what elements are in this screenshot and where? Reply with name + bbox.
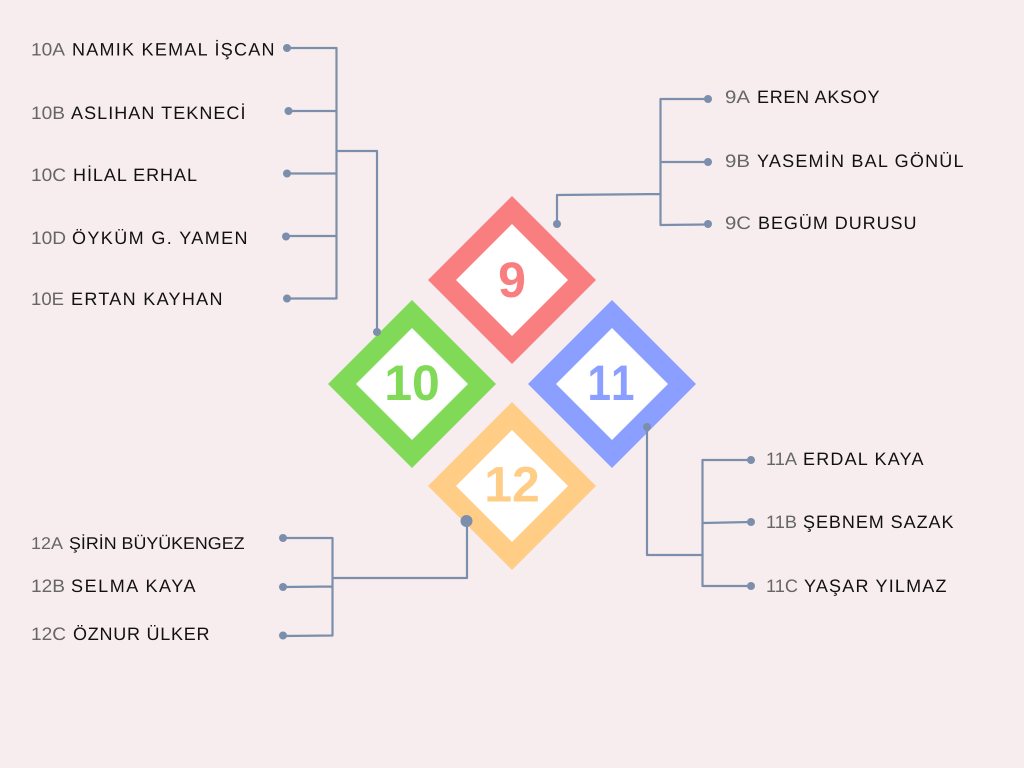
connector: group 11	[643, 423, 755, 590]
label 9B: YASEMİN BAL GÖNÜL	[757, 151, 964, 171]
label 11C: YAŞAR YILMAZ	[804, 576, 946, 596]
label 11C: 11C	[766, 576, 798, 596]
diamond 9: 9	[498, 252, 526, 308]
label 9C: BEGÜM DURUSU	[758, 213, 916, 233]
label 10E: 10E	[31, 289, 64, 309]
label 12C: 12C	[31, 624, 66, 644]
label 10B: 10B	[31, 103, 65, 123]
label 10A: NAMIK KEMAL İŞCAN	[72, 40, 274, 60]
connector: group 10	[282, 44, 381, 336]
diamond 11: 11	[588, 355, 634, 411]
label 10C: 10C	[31, 165, 66, 185]
diamond 12: 12	[484, 456, 540, 512]
label 9A: EREN AKSOY	[757, 87, 880, 107]
label 11A: 11A	[766, 449, 797, 469]
label 12B: 12B	[31, 576, 65, 596]
diamond 12	[428, 402, 596, 570]
label 11B: 11B	[766, 512, 797, 532]
diamond 11	[528, 300, 696, 468]
label 10D: 10D	[31, 228, 66, 248]
label 12B: SELMA KAYA	[71, 576, 196, 596]
label 10B: ASLIHAN TEKNECİ	[71, 103, 246, 123]
connector: group 9	[553, 95, 712, 228]
diamond 10: 10	[384, 355, 440, 411]
label 10E: ERTAN KAYHAN	[71, 289, 222, 309]
label 11A: ERDAL KAYA	[803, 449, 924, 469]
label 12A: ŞİRİN BÜYÜKENGEZ	[69, 534, 245, 553]
label 9C: 9C	[725, 213, 751, 233]
label 10A: 10A	[31, 40, 65, 60]
label 9A: 9A	[725, 87, 750, 107]
label 12C: ÖZNUR ÜLKER	[73, 624, 210, 644]
diamond 10	[328, 300, 496, 468]
connector: group 12	[279, 515, 472, 640]
label 10D: ÖYKÜM G. YAMEN	[72, 228, 248, 248]
label 9B: 9B	[725, 151, 750, 171]
label 10C: HİLAL ERHAL	[73, 165, 197, 185]
label 11B: ŞEBNEM SAZAK	[803, 512, 954, 532]
diamond 9	[428, 196, 596, 364]
label 12A: 12A	[31, 534, 64, 553]
